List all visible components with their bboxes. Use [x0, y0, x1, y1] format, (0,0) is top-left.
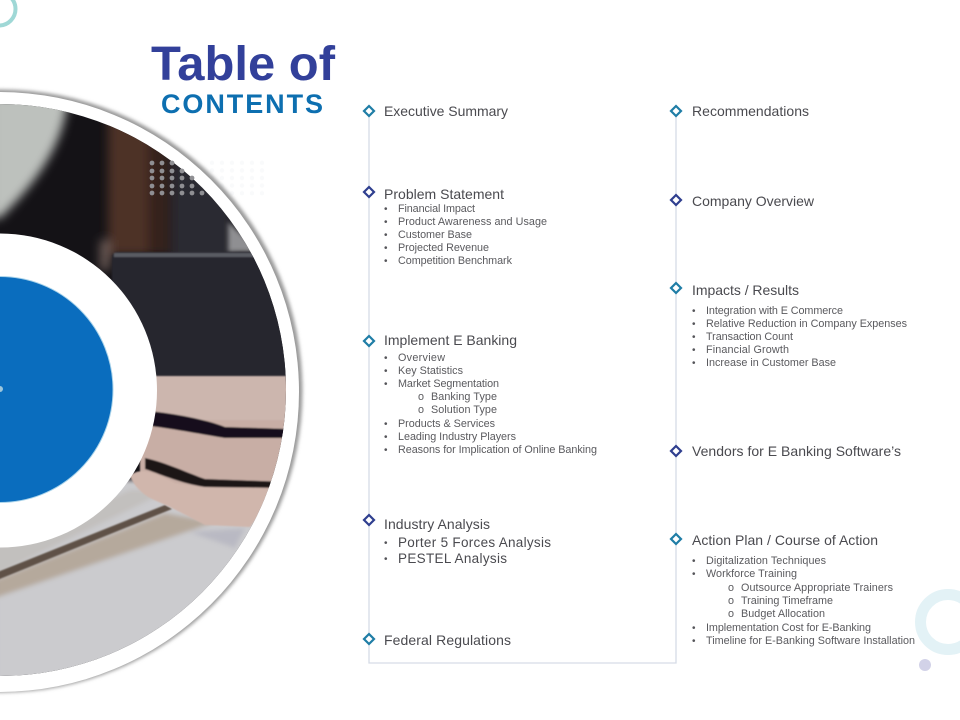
timeline frame: [369, 111, 676, 663]
decorative ring: bottom right: [920, 594, 960, 650]
decorative ring: top left: [0, 0, 16, 26]
item: Action Plan / Course of Action: •: [692, 623, 696, 634]
item: Problem Statement: Problem Statement: [384, 186, 504, 202]
item: Action Plan / Course of Action: Workforce Training: [706, 568, 797, 580]
item: Federal Regulations: Federal Regulations: [384, 632, 511, 648]
item: Industry Analysis: •: [384, 538, 388, 549]
right column: [671, 103, 915, 647]
photo: hand holding phone: [0, 95, 295, 690]
item: Impacts / Results: Transaction Count: [706, 331, 793, 343]
item: Recommendations: Recommendations: [692, 103, 809, 119]
item: Problem Statement: •: [384, 243, 388, 254]
item: Implement E Banking: •: [384, 432, 388, 443]
small centre marker: [0, 386, 3, 392]
item: Action Plan / Course of Action: Timeline for E-Banking Software Installation: [706, 635, 915, 647]
phone: [112, 252, 290, 392]
item: Impacts / Results: •: [692, 319, 696, 330]
item: Impacts / Results: •: [692, 358, 696, 369]
inner white circle: [0, 234, 157, 548]
item: Problem Statement: Customer Base: [398, 229, 472, 241]
item: Impacts / Results: •: [692, 345, 696, 356]
title line 2: CONTENTS: [161, 89, 323, 119]
item: Problem Statement: Product Awareness and Usage: [398, 216, 547, 228]
item: Action Plan / Course of Action: [671, 532, 915, 647]
item: Implement E Banking: •: [384, 419, 388, 430]
item: Executive Summary: Executive Summary: [384, 103, 508, 119]
item: Implement E Banking: Reasons for Implication of Online Banking: [398, 444, 597, 456]
title: [151, 38, 336, 119]
item: Impacts / Results: Increase in Customer Base: [706, 357, 836, 369]
item: Impacts / Results: Financial Growth: [706, 344, 789, 356]
item: Implement E Banking: •: [384, 366, 388, 377]
item: Impacts / Results: •: [692, 306, 696, 317]
item: Problem Statement: Projected Revenue: [398, 242, 489, 254]
item: Action Plan / Course of Action: Budget Allocation: [741, 608, 825, 620]
desk and laptop edge: [0, 478, 272, 676]
fingers: [130, 376, 290, 527]
item: Implement E Banking: Products & Services: [398, 418, 496, 430]
item: Implement E Banking: •: [384, 445, 388, 456]
item: Industry Analysis: Industry Analysis: [384, 516, 490, 532]
item: Implement E Banking: Leading Industry Players: [398, 431, 517, 443]
item: Impacts / Results: [671, 282, 908, 369]
item: Action Plan / Course of Action: Outsource Appropriate Trainers: [741, 582, 894, 594]
item: Impacts / Results: Integration with E Commerce: [706, 305, 843, 317]
item: Implement E Banking: o: [418, 404, 424, 416]
item: Implement E Banking: •: [384, 379, 388, 390]
item: Problem Statement: [364, 186, 547, 267]
item: Action Plan / Course of Action: Implementation Cost for E-Banking: [706, 622, 871, 634]
item: Action Plan / Course of Action: •: [692, 556, 696, 567]
item: Action Plan / Course of Action: •: [692, 636, 696, 647]
item: Problem Statement: •: [384, 217, 388, 228]
item: Implement E Banking: [364, 332, 597, 456]
item: Implement E Banking: Implement E Banking: [384, 332, 517, 348]
item: Implement E Banking: Overview: [398, 352, 445, 364]
item: Implement E Banking: Key Statistics: [398, 365, 464, 377]
item: Implement E Banking: •: [384, 353, 388, 364]
item: Action Plan / Course of Action: •: [692, 569, 696, 580]
item: Industry Analysis: •: [384, 554, 388, 565]
item: Problem Statement: Financial Impact: [398, 203, 475, 215]
item: Action Plan / Course of Action: Digitalization Techniques: [706, 555, 827, 567]
faint dot grid outside photo: [205, 159, 265, 197]
outer white ring: [0, 92, 299, 692]
item: Impacts / Results: •: [692, 332, 696, 343]
item: Impacts / Results: Relative Reduction in Company Expenses: [706, 318, 908, 330]
item: Company Overview: Company Overview: [692, 193, 815, 209]
dot grid over photo: [150, 161, 204, 195]
item: Problem Statement: •: [384, 230, 388, 241]
title line 1: Table of: [151, 38, 336, 91]
item: Action Plan / Course of Action: Training Timeframe: [741, 595, 833, 607]
item: Industry Analysis: Porter 5 Forces Analysis: [398, 535, 551, 550]
item: Problem Statement: Competition Benchmark: [398, 255, 513, 267]
item: Industry Analysis: [364, 515, 551, 566]
item: Problem Statement: •: [384, 256, 388, 267]
item: Implement E Banking: Market Segmentation: [398, 378, 499, 390]
item: Industry Analysis: PESTEL Analysis: [398, 551, 507, 566]
item: Implement E Banking: o: [418, 391, 424, 403]
item: Problem Statement: •: [384, 204, 388, 215]
circular photo panel: [0, 90, 302, 692]
item: Action Plan / Course of Action: o: [728, 595, 734, 607]
decorative dot: bottom right: [919, 659, 931, 671]
item: Vendors for E Banking Software's: Vendors for E Banking Software’s: [692, 443, 901, 459]
item: Implement E Banking: Solution Type: [431, 404, 497, 416]
item: Action Plan / Course of Action: Action Plan / Course of Action: [692, 532, 878, 548]
item: Action Plan / Course of Action: o: [728, 608, 734, 620]
outer ring shadow: [0, 90, 302, 692]
blue circle: [0, 276, 113, 502]
item: Action Plan / Course of Action: o: [728, 582, 734, 594]
item: Impacts / Results: Impacts / Results: [692, 282, 799, 298]
left column: [364, 103, 597, 648]
item: Implement E Banking: Banking Type: [431, 391, 497, 403]
